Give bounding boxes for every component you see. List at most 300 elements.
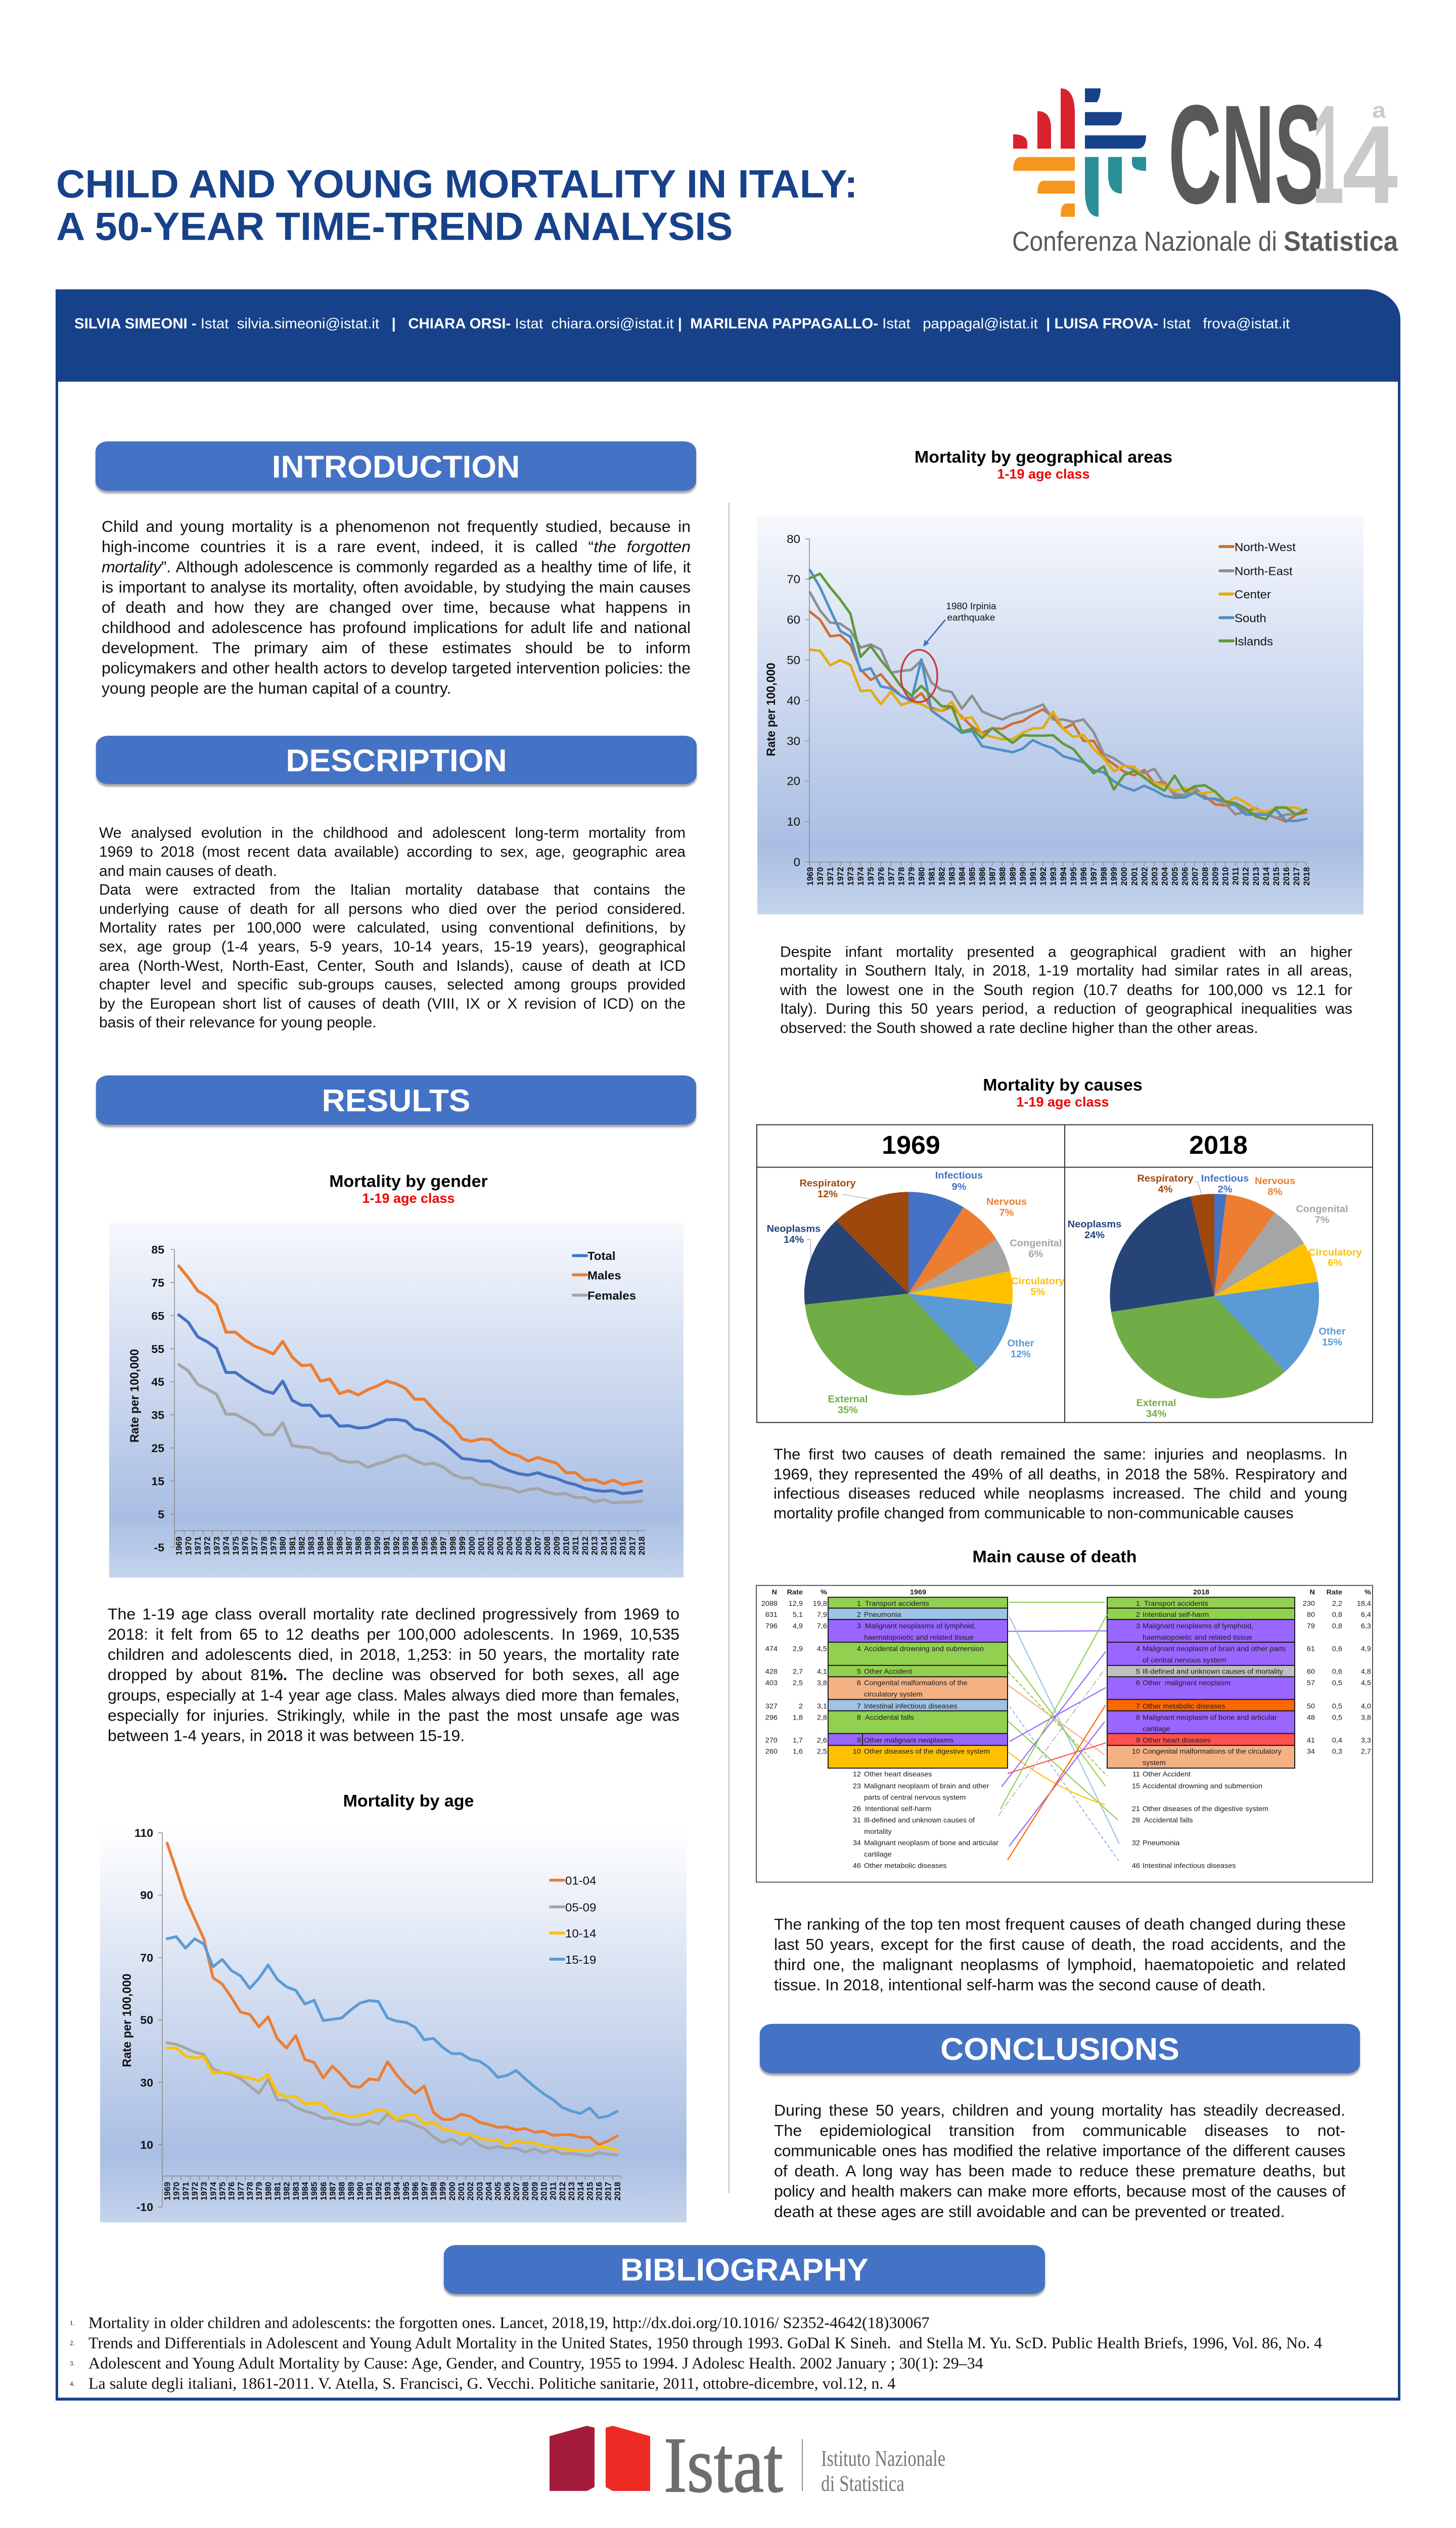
text: description: We analysed evolution in the childhood and adolescent long-term mortality from [99,825,686,841]
title: A 50-YEAR TIME-TREND ANALYSIS [56,204,733,248]
text: ranking findings: third one, the malignant neoplasms of lymphoid, haematopoietic and related [774,1956,1346,1973]
pie: 1969: 14% [784,1234,804,1245]
text: 2018 column: 61 [1307,1645,1315,1653]
line chart: mortality by age: 2016 [594,2182,604,2200]
line chart: mortality by geographical areas: 2016 [1282,867,1291,886]
text: 2018 column: 0,6 [1332,1668,1342,1676]
line chart: mortality by age: 50 [140,2013,153,2026]
line chart: mortality by gender: 1975 [231,1537,241,1555]
text: 1969 column: Accidental falls [865,1714,914,1722]
chart title: mortality by geographical areas: 1-19 age class [997,467,1090,481]
pie: 2018: Congenital [1296,1204,1348,1214]
line chart: mortality by age: 2018 [613,2182,622,2200]
heading: results [96,1075,696,1125]
text: 1969 column: 10 [853,1748,861,1756]
text: 1969 column: 1,6 [793,1748,803,1756]
text: 2018 column: system [1143,1759,1166,1767]
pie: 1969: 5% [1031,1287,1045,1297]
text: conclusions: communicable ones has modified the relative importance of the different causes [774,2142,1345,2159]
text: 2018 column: 0,5 [1332,1714,1342,1722]
line chart: mortality by gender: 75 [151,1276,164,1289]
line chart: mortality by geographical areas: 1979 [906,867,916,886]
text: causes findings: The first two causes of death remained the same: injuries and neoplasms. In [774,1446,1347,1463]
line chart: mortality by age: 1980 [263,2182,273,2200]
text: 1969 column: 796 [765,1622,778,1631]
logo: CNS 14a conference: Conferenza Nazionale di [1012,226,1277,257]
text: 1969 column: 2 [799,1702,803,1710]
text: 2018 column: Accidental falls [1144,1817,1193,1824]
text: 1969 column: 2 [857,1611,861,1619]
line chart: mortality by geographical areas: 1994 [1059,867,1068,886]
line chart: mortality by gender: 15 [151,1475,164,1487]
text: 2018 column: of central nervous system [1143,1656,1226,1664]
text: 2018 column: 8 [1136,1714,1140,1722]
line chart: mortality by age: 10-14 [565,1927,596,1940]
text: 1969 column: 5 [857,1668,861,1676]
text: 2018 column: 230 [1303,1600,1315,1608]
text: 2018 column: Malignant neoplasms of lymphoid, [1143,1622,1253,1631]
line chart: mortality by geographical areas: 1969 [805,867,815,886]
text: geographical findings: observed: the South showed a rate decline higher than the other areas. [780,1020,1258,1036]
text: 1969 column: 403 [765,1679,778,1687]
heading: introduction [96,441,696,491]
line chart: mortality by gender: 1985 [325,1537,335,1555]
text: 1969 column: 270 [765,1736,778,1744]
line chart: mortality by age: 1989 [346,2182,356,2200]
text: introduction [102,517,691,697]
text: 1969 column: 2,7 [793,1668,803,1676]
text: conclusions: policy and health makers can make more efforts, because most of the causes of [774,2182,1345,2200]
text: 1969 column: Other Accident [864,1668,912,1676]
text: 1969 column: 8 [857,1714,861,1722]
line chart: mortality by geographical areas: Center [1235,589,1271,602]
text: 2018 column: 0,5 [1332,1702,1342,1710]
text: gender findings: 2018: it felt from 65 to 12 deaths per 100,000 adolescents. In 1969, 10,535 [108,1626,679,1643]
line chart: mortality by gender: 1986 [335,1537,344,1555]
text: ranking findings: tissue. In 2018, intentional self-harm was the second cause of death. [774,1976,1266,1994]
text: 1969 column: Intentional self-harm [865,1805,931,1813]
line chart: mortality by geographical areas: 1971 [826,867,835,886]
text: 1969 column: cartilage [864,1850,892,1859]
line chart: mortality by age: 15-19 [565,1954,596,1967]
pie: 2018: 6% [1328,1257,1343,1269]
text: 2018 column: Congenital malformations of the circulatory [1143,1748,1282,1756]
line chart: mortality by gender: 1996 [429,1537,439,1555]
text: gender findings: dropped by about 81%. The decline was observed for both sexes, all age [108,1666,679,1684]
heading: conclusions: CONCLUSIONS [940,2032,1179,2067]
text: description: and main causes of death. [99,863,277,879]
line chart: mortality by gender: 2003 [495,1537,505,1555]
line chart: mortality by geographical areas: 1982 [937,867,947,886]
rows: 2018 top ten [1107,1597,1295,1768]
line chart: mortality by age: 1990 [355,2182,365,2200]
line chart: mortality by age [100,1827,687,2223]
line chart: mortality by age: 2002 [466,2182,475,2200]
pie: 1969: Neoplasms [767,1224,821,1234]
line chart: mortality by geographical areas: 1991 [1028,867,1038,886]
line chart: mortality by age: 1997 [420,2182,429,2200]
text: 1969 column: 19,8 [813,1600,827,1608]
line chart: mortality by geographical areas: 2015 [1271,867,1281,886]
line chart: mortality by age: 90 [140,1888,153,1902]
pie: 1969: Other [1007,1338,1034,1349]
text: 2018 column: 50 [1307,1702,1315,1710]
line chart: mortality by age: 2013 [567,2182,576,2200]
line chart: mortality by age: 1983 [291,2182,301,2200]
line chart: mortality by age: 1969 [162,2182,172,2200]
line chart: mortality by age: -10 [136,2200,153,2214]
text: 1969 column: 6 [857,1679,861,1687]
text: geographical findings: mortality in Southern Italy, in 2018, 1-19 mortality had similar rates in all areas, [780,963,1352,979]
chart title: mortality by gender: 1-19 age class [362,1191,455,1206]
text: 1969 column: 296 [765,1714,778,1722]
line chart: mortality by gender: 1979 [268,1537,279,1555]
pie: 1969: External [828,1394,868,1405]
text: 2018 column [1132,1588,1371,1870]
line chart: mortality by geographical areas: 1987 [988,867,997,886]
text: 2018 column: Intentional self-harm [1143,1611,1209,1619]
line chart: mortality by geographical areas: South [1235,612,1266,625]
line chart: mortality by gender: 2002 [486,1537,495,1555]
line chart: mortality by geographical areas: 1980 Irpinia [946,601,996,611]
line chart: mortality by geographical areas: 1985 [967,867,977,886]
text: 2018 column: 15 [1132,1782,1140,1790]
panel: pie charts 1969 and 2018: 2018 [1189,1131,1248,1159]
text: introduction: mortality”. Although adolescence is commonly regarded as a healthy time of life, it [102,558,691,576]
line chart: mortality by gender: 1983 [306,1537,316,1555]
line chart: mortality by gender: 1980 [278,1537,288,1555]
pie: 2018: Circulatory [1308,1247,1362,1258]
text: 2018 column: 0,4 [1332,1736,1342,1744]
line chart: mortality by gender: 2018 [637,1537,647,1555]
line chart: mortality by geographical areas: 2012 [1241,867,1251,886]
text: 2018 column: Other heart diseases [1143,1736,1211,1744]
line chart: mortality by geographical areas: 50 [787,654,800,667]
line chart: mortality by gender: 2009 [552,1537,562,1555]
line chart: mortality by age: 10 [140,2138,153,2151]
line chart: mortality by geographical areas: 1998 [1099,867,1109,886]
line chart: mortality by age: 1978 [245,2182,255,2200]
text: 2018 column: Intestinal infectious diseases [1143,1862,1236,1870]
pie: 2018: Infectious [1201,1173,1249,1184]
text: introduction: Child and young mortality is a phenomenon not frequently studied, because in [102,517,691,535]
text: 1969 column: Malignant neoplasm of bone and articular [864,1839,998,1847]
line chart: mortality by geographical areas: 1999 [1109,867,1119,886]
text: 2018 column: 80 [1307,1611,1315,1619]
text: 2018 column: 21 [1132,1805,1140,1813]
text: gender findings [108,1605,679,1744]
line chart: mortality by geographical areas: 80 [787,533,800,546]
line chart: mortality by geographical areas [757,517,1363,914]
line chart: mortality by gender: 2017 [627,1537,637,1555]
line chart: mortality by gender: 1974 [221,1536,231,1555]
text: 2. [70,2339,75,2347]
text: bibliography references: Trends and Differentials in Adolescent and Young Adult Mortality in the United States, 1950 through 1993. GoDal K Sineh. and Stella M. Yu. ScD. Public Health Briefs, 1996, Vol. 86, No. 4 [88,2334,1322,2352]
line chart: mortality by gender: 2005 [514,1537,524,1555]
pie: 1969: 12% [1011,1349,1031,1360]
line chart: mortality by age: 2000 [447,2182,457,2200]
text: causes findings: infectious diseases reduced while neoplasms increased. The child and young [774,1485,1347,1502]
line chart: mortality by gender: 25 [151,1441,164,1455]
text: 2018 column: 4,0 [1361,1702,1371,1710]
line chart: mortality by age: 1988 [337,2182,347,2200]
table: ranking of main causes of death 1969 vs 2018 [756,1585,1373,1883]
text: 1969 column: mortality [864,1828,892,1836]
chart title: main cause of death: Main cause of death [973,1548,1136,1566]
pie: 2018: Nervous [1255,1176,1295,1187]
line chart: mortality by age: 1987 [328,2182,338,2200]
text: 1969 column: 428 [765,1668,778,1676]
line chart: mortality by gender: 1995 [420,1537,429,1555]
text: 1969 column: 12,9 [789,1600,803,1608]
text: 2018 column: 4 [1136,1645,1140,1653]
line chart: mortality by geographical areas: 2003 [1150,867,1159,886]
text: 1969 column: 1969 [910,1588,926,1596]
line chart: mortality by geographical areas: Islands [1235,636,1273,648]
text: 1969 column: 4,1 [817,1668,827,1676]
chart title: mortality by age: Mortality by age [343,1792,474,1811]
line chart: mortality by age: 2007 [512,2182,521,2200]
line chart: mortality by geographical areas: 1976 [876,867,886,886]
line chart: mortality by gender: 2016 [618,1537,628,1555]
heading: results: RESULTS [322,1083,470,1118]
pie: 2018: 2% [1218,1184,1233,1195]
chart title: mortality by geographical areas [915,448,1172,481]
line chart: mortality by geographical areas: 2018 [1302,867,1311,886]
line chart: mortality by gender: 1976 [240,1537,250,1555]
line chart: mortality by geographical areas: 1995 [1069,867,1078,886]
line chart: mortality by geographical areas: 70 [787,573,800,586]
pie: 2018: Other [1318,1326,1346,1337]
line chart: mortality by gender: 1978 [259,1537,269,1555]
text: 1969 column [761,1588,998,1870]
text: 2018 column: 1 [1136,1600,1140,1608]
text: 1969 column: Rate [787,1588,803,1596]
text: 1969 column: 2088 [761,1600,778,1608]
line chart: mortality by age: 1996 [411,2182,420,2200]
line chart: mortality by gender: 65 [151,1310,164,1322]
text: bibliography references: Mortality in older children and adolescents: the forgotten ones. Lancet, 2018,19, http://dx.doi.org/10.1016/ S2352-4642(18)30067 [88,2314,929,2331]
line chart: mortality by gender: Males [587,1270,621,1282]
text: description: basis of their relevance for young people. [99,1015,377,1031]
text: description: 1969 to 2018 (most recent data available) according to sex, age, geographic area [99,844,686,861]
text: ranking findings: last 50 years, except for the first cause of death, the road accidents, and the [774,1935,1346,1953]
line chart: mortality by age: 70 [140,1951,153,1964]
text: 1969 column: Pneumonia [864,1611,901,1619]
text: 2018 column: 7 [1136,1702,1140,1710]
text: 2018 column: 46 [1132,1862,1140,1870]
text: 1969 column: 327 [765,1702,778,1710]
line chart: mortality by gender: 35 [151,1409,164,1422]
text: description: area (North-West, North-East, Center, South and Islands), cause of death at ICD [99,958,686,974]
line chart: mortality by geographical areas: 1984 [957,867,967,886]
text: 1969 column: 4 [857,1645,861,1653]
pie: 1969: 7% [999,1207,1014,1218]
main poster frame [56,346,1400,2401]
text: 2018 column: 10 [1132,1748,1140,1756]
text: bibliography references: Adolescent and Young Adult Mortality by Cause: Age, Gender, and Country, 1955 to 1994. J Adolesc Health. 2002 January ; 30(1): 29–34 [88,2354,983,2372]
text: 2018 column: Transport accidents [1144,1600,1208,1608]
line chart: mortality by gender: 55 [151,1342,164,1356]
text: 2018 column: 60 [1307,1668,1315,1676]
line chart: mortality by gender: 1992 [391,1537,401,1555]
text: 1969 column: 1,7 [793,1736,803,1744]
pie: 2018: External [1136,1397,1176,1409]
text: 1969 column: Other malignant neoplasms [864,1736,953,1744]
text: 1969 column: 260 [765,1748,778,1756]
authors band [56,289,1400,382]
text: 2018 column: Ill-defined and unknown causes of mortality [1143,1668,1284,1676]
text: 1969 column: 5,1 [793,1611,803,1619]
line chart: mortality by age: 30 [140,2076,153,2089]
text: 2018 column: 0,5 [1332,1679,1342,1687]
text: 1969 column: 9 [857,1736,861,1744]
text: 2018 column: 2,2 [1332,1600,1342,1608]
line chart: mortality by gender: 2007 [533,1537,543,1555]
line chart: mortality by geographical areas: 1989 [1008,867,1018,886]
line chart: mortality by geographical areas: 2008 [1200,867,1210,886]
line chart: mortality by gender: 1981 [288,1537,297,1555]
line chart: mortality by age: 2012 [558,2182,567,2200]
pie: 2018 [1068,1173,1362,1420]
line chart: mortality by geographical areas: 60 [787,614,800,626]
text: 1969 column: 1 [857,1600,861,1608]
pie: 1969: Nervous [986,1196,1027,1207]
text: causes findings: 1969, they represented the 49% of all deaths, in 2018 the 58%. Respiratory and [774,1465,1347,1482]
pie: 2018: Respiratory [1137,1173,1194,1184]
line chart: mortality by gender: 1988 [353,1537,363,1555]
heading: bibliography [444,2245,1045,2294]
text: 2018 column: Rate [1327,1588,1342,1596]
text: 2018 column: N [1310,1588,1315,1596]
text: 2018 column: 57 [1307,1679,1315,1687]
text: 1969 column: Other heart diseases [864,1771,932,1779]
line chart: mortality by gender: Females [587,1290,636,1302]
text: 2018 column: 0,3 [1332,1748,1342,1756]
text: 2018 column: 11 [1132,1771,1140,1779]
panel: pie charts 1969 and 2018 [756,1124,1373,1423]
line chart: mortality by age: 1999 [438,2182,448,2200]
line chart: mortality by gender: 1998 [448,1537,458,1555]
text: conclusions: of death. A long way has been made to reduce these premature deaths, but [774,2162,1345,2180]
text: 1969 column: 2,6 [817,1736,827,1744]
text: conclusions [774,2101,1346,2221]
text: gender findings: between 1-4 years, in 2018 it was between 15-19. [108,1727,465,1744]
text: 1969 column: 7,6 [817,1622,827,1631]
text: introduction: development. The primary aim of these estimates should be to inform [102,639,691,657]
pie: 1969: Congenital [1010,1238,1062,1249]
line chart: mortality by gender: 1993 [401,1537,411,1555]
text: 2018 column: 34 [1307,1748,1315,1756]
line chart: mortality by age: 1986 [318,2182,328,2200]
line chart: mortality by geographical areas: 1972 [836,867,845,886]
text: description [99,825,686,1031]
text: description: Data were extracted from the Italian mortality database that contains the [99,882,686,898]
text: 1969 column: 31 [853,1817,861,1824]
line chart: mortality by age: 1977 [236,2182,246,2200]
text: 1969 column: Other metabolic diseases [864,1862,947,1870]
text: 2018 column: 5 [1136,1668,1140,1676]
rank change connector lines [998,1602,1119,1861]
pie: 1969: 9% [952,1182,967,1192]
line chart: mortality by age: 2008 [521,2182,530,2200]
text: 2018 column: Other Accident [1143,1771,1191,1779]
line chart: mortality by gender: 1971 [193,1537,203,1555]
heading: description [96,736,697,784]
text: 1969 column: 23 [853,1782,861,1790]
text: 1969 column: 2,5 [817,1748,827,1756]
pie: 1969: Respiratory [799,1178,856,1189]
text: 2018 column: 3,3 [1361,1736,1371,1744]
text: 1969 column: Intestinal infectious diseases [864,1702,958,1710]
text: causes findings: mortality profile changed from communicable to non-communicable causes [774,1504,1294,1521]
pie: 1969: Circulatory [1011,1276,1065,1287]
line chart: mortality by age: 1992 [374,2182,383,2200]
text: 1969 column: 12 [853,1771,861,1779]
line chart: mortality by age: 1995 [401,2182,411,2200]
text: 2018 column: 0,8 [1332,1611,1342,1619]
text: introduction: childhood and adolescence has profound implications for adult life and national [102,619,691,637]
line chart: mortality by gender: 1990 [373,1537,382,1555]
heading: bibliography: BIBLIOGRAPHY [620,2252,869,2287]
line chart: mortality by age: 2017 [603,2182,613,2200]
text: introduction: is important to analyse its mortality, often avoidable, by studying the main causes [102,578,691,596]
text: gender findings: groups, especially at 1-4 year age class. Males always died more than females, [108,1686,679,1704]
text: conclusions: death at these ages are still avoidable and can be prevented or treated. [774,2202,1285,2221]
line chart: mortality by gender: 1984 [316,1536,326,1555]
text: 2018 column: 3 [1136,1622,1140,1631]
line chart: mortality by age: 2009 [530,2182,539,2200]
text: 2018 column: Malignant neoplasm of bone and articular [1143,1714,1277,1722]
heading: description: DESCRIPTION [286,743,507,778]
line chart: mortality by geographical areas: 1988 [998,867,1008,886]
line chart: mortality by geographical areas: 1978 [896,867,906,886]
text: conclusions: The epidemiological transition from communicable diseases to not- [774,2121,1345,2139]
line chart: mortality by gender: 2000 [467,1537,477,1555]
text: 1969 column: 46 [853,1862,861,1870]
line chart: mortality by gender: 2008 [542,1537,552,1555]
text: 2018 column: 4,9 [1361,1645,1371,1653]
line chart: mortality by age: 2011 [548,2182,558,2200]
text: 2018 column: 6,4 [1361,1611,1371,1619]
logo: CNS 14a conference [1012,84,1398,257]
text: description: by the European short list of causes of death (VIII, IX or X revision of ICD) on the [99,996,686,1012]
line chart: mortality by geographical areas: 2011 [1231,867,1241,885]
text: 2018 column: Other malignant neoplasm [1143,1679,1231,1687]
pie: 1969: 12% [817,1189,838,1200]
text: 2018 column: 9 [1136,1736,1140,1744]
text: description: underlying cause of death for all persons who died over the period considered. [99,901,686,917]
line chart: mortality by age: 2004 [484,2182,493,2200]
line chart: mortality by gender: 1972 [203,1537,212,1555]
line chart: mortality by gender: 1977 [250,1537,259,1555]
text: conclusions: During these 50 years, children and young mortality has steadily decreased. [774,2101,1345,2119]
line chart: mortality by geographical areas: 1974 [856,867,866,886]
text: geographical findings: with the lowest one in the South region (10.7 deaths for 100,000 vs 12.1 for [780,982,1352,998]
line chart: mortality by geographical areas: North-West [1235,541,1296,554]
text: 1969 column: 3,8 [817,1679,827,1687]
pie: 1969: Infectious [935,1170,983,1181]
text: 1969 column: Ill-defined and unknown causes of [864,1817,975,1824]
text: 1969 column: Other diseases of the digestive system [864,1748,990,1756]
line chart: mortality by gender: Rate per 100,000 [128,1349,142,1442]
chart title: mortality by causes [983,1076,1143,1109]
line chart: mortality by gender: 1991 [382,1537,392,1555]
text: 1969 column: Congenital malformations of the [864,1679,968,1687]
line chart: mortality by age: 1975 [217,2182,228,2200]
chart title: mortality by geographical areas: Mortality by geographical areas [915,448,1172,467]
text: 1969 column: 831 [765,1611,778,1619]
